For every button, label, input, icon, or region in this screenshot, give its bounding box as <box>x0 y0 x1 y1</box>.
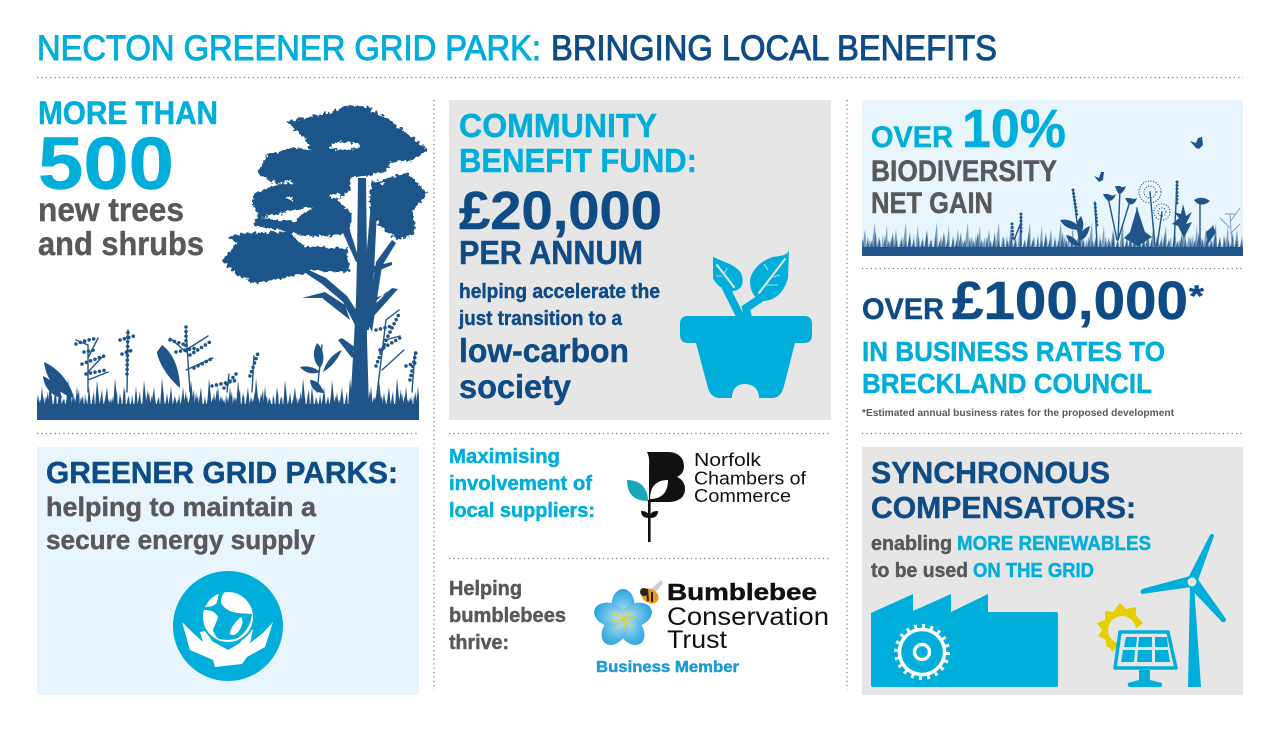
text: enabling more renewables: enabling <box>871 533 952 555</box>
text: new trees and shrubs: new trees <box>38 191 184 228</box>
icon: factory with gear <box>871 594 1058 687</box>
heading: synchronous compensators: COMPENSATORS: <box>871 490 1136 525</box>
title: BRINGING LOCAL BENEFITS <box>551 28 997 68</box>
heading: synchronous compensators: SYNCHRONOUS <box>871 455 1110 490</box>
icon: globe in hands <box>173 571 283 681</box>
footnote: *Estimated annual business rates for the proposed development <box>862 408 1175 419</box>
text: maximising involvement: local suppliers: <box>449 500 595 522</box>
logo: Norfolk Chambers of Commerce: Norfolk <box>694 450 762 470</box>
logo: Bumblebee Conservation Trust: Bumblebee <box>667 579 817 605</box>
logo: Bumblebee Conservation Trust: Trust <box>667 626 727 654</box>
panel: bumblebees <box>449 578 829 676</box>
logo: Bumblebee Conservation Trust: Conservation <box>667 603 829 631</box>
heading: more than 500 <box>38 95 218 205</box>
logo: Bumblebee Conservation Trust <box>591 579 829 676</box>
text: business rates to breckland council: BRECKLAND COUNCIL <box>862 368 1152 399</box>
stat: over 10%: 10% <box>962 99 1066 159</box>
text: helping bumblebees thrive: Helping <box>449 578 522 600</box>
text: enabling more renewables: MORE RENEWABLES <box>957 533 1151 555</box>
icon: butterflies <box>1094 137 1203 182</box>
title <box>37 28 997 68</box>
text: enabling more renewables: to be used <box>871 560 968 582</box>
text: just transition: helping accelerate the <box>459 281 660 303</box>
text: secure energy supply: helping to maintain a <box>46 492 317 522</box>
heading: more than 500: 500 <box>38 122 174 205</box>
icon: plant pot <box>680 250 812 398</box>
panel: business rates <box>862 271 1204 419</box>
text: enabling more renewables <box>871 533 1151 582</box>
panel: local suppliers <box>449 446 807 542</box>
text: business rates to breckland council: IN BUSINESS RATES TO <box>862 336 1165 367</box>
icon: sun <box>1097 603 1143 652</box>
text: new trees and shrubs <box>38 191 204 262</box>
stat: over 100,000: * <box>1189 280 1204 313</box>
text: biodiversity net gain <box>871 155 1057 220</box>
text: helping bumblebees thrive: bumblebees <box>449 605 566 627</box>
text: just transition: society <box>459 368 572 405</box>
icon: solar panel <box>1115 632 1176 687</box>
text: biodiversity net gain: BIODIVERSITY <box>871 155 1057 188</box>
stat: 20,000 per annum: PER ANNUM <box>459 234 643 271</box>
panel: biodiversity net gain <box>862 99 1243 256</box>
heading: more than 500: MORE THAN <box>38 95 218 131</box>
stat: over 100,000 <box>862 271 1204 331</box>
stat: 20,000 per annum: £20,000 <box>459 181 662 241</box>
text: just transition <box>458 281 660 405</box>
heading: greener grid parks: GREENER GRID PARKS: <box>46 455 398 490</box>
stat: over 10%: OVER <box>871 121 953 154</box>
panel: community benefit fund <box>449 100 831 420</box>
panel: trees <box>37 95 428 420</box>
chart: meadow grass and plants <box>37 310 419 420</box>
stat: over 100,000: OVER <box>862 293 944 326</box>
logo: Bumblebee Conservation Trust: Business Member <box>596 659 739 676</box>
stat: over 10% <box>871 99 1066 159</box>
icon: bee <box>639 580 663 607</box>
text: helping bumblebees thrive: thrive: <box>449 632 509 654</box>
icon: wind turbine <box>1140 534 1226 687</box>
text: secure energy supply <box>46 492 317 555</box>
logo: Norfolk Chambers of Commerce <box>627 450 807 542</box>
heading: community benefit fund <box>459 107 697 179</box>
text: business rates to breckland council <box>862 336 1165 399</box>
text: just transition: low-carbon <box>459 332 629 369</box>
text: new trees and shrubs: and shrubs <box>38 225 204 262</box>
panel: synchronous compensators <box>862 447 1243 695</box>
icon: flower <box>591 589 655 650</box>
text: secure energy supply: secure energy supply <box>46 525 315 555</box>
heading: synchronous compensators <box>871 455 1136 525</box>
text: biodiversity net gain: NET GAIN <box>871 187 993 220</box>
text: enabling more renewables: ON THE GRID <box>973 560 1094 582</box>
text: maximising involvement <box>449 446 595 522</box>
title: NECTON GREENER GRID PARK: <box>37 28 541 68</box>
stat: 20,000 per annum <box>459 181 662 271</box>
text: maximising involvement: Maximising <box>449 446 560 468</box>
chart: wildflower meadow <box>862 137 1243 256</box>
text: maximising involvement: involvement of <box>449 473 592 495</box>
stat: over 100,000: £100,000 <box>952 271 1188 331</box>
heading: community benefit fund: BENEFIT FUND: <box>459 142 697 179</box>
panel: greener grid parks <box>37 447 419 695</box>
logo: Norfolk Chambers of Commerce: Chambers of <box>694 468 807 488</box>
text: just transition: just transition to a <box>458 308 623 330</box>
logo: Norfolk Chambers of Commerce: Commerce <box>694 486 791 506</box>
icon: tree silhouette <box>222 105 428 408</box>
text: helping bumblebees thrive <box>449 578 566 654</box>
heading: community benefit fund: COMMUNITY <box>459 107 657 144</box>
